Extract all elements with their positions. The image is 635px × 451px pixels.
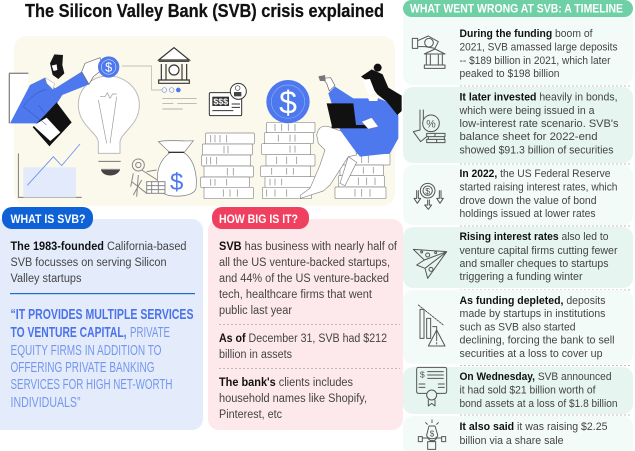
icon: hands holding money bag: [418, 420, 446, 449]
timeline step: deposits decline: such as SVB also started: [460, 322, 576, 334]
text: business share: [219, 241, 398, 317]
text: clients: household names like Shopify,: [219, 393, 367, 405]
illustration: woman with laptop: [301, 64, 402, 198]
timeline step: funding boom: peaked to $198 billion: [460, 68, 560, 80]
text: intro: [10, 241, 186, 285]
icon: dollar coin small: $: [105, 61, 112, 75]
icon: money bag: $: [170, 169, 183, 196]
timeline step: deposits decline: made by startups in institutions: [460, 308, 606, 320]
icon: keys: [131, 159, 165, 197]
badge: what is SVB: [2, 207, 93, 229]
text: business share: public last year: [219, 305, 292, 317]
text: quote: INDIVIDUALS”: [10, 394, 81, 411]
icon: interest down with coins: [413, 110, 445, 143]
icon: large dollar coin: $: [279, 84, 297, 120]
title: The Silicon Valley Bank (SVB) crisis explained: [25, 1, 384, 21]
icon: coin with down arrows: $: [425, 186, 430, 196]
panel: timeline: [403, 0, 633, 451]
coin stack right: [335, 154, 390, 199]
icon: falling bars and warning: [418, 305, 445, 346]
timeline step: funding boom: -- $189 billion in 2021, which later: [460, 55, 611, 67]
timeline step: share sale: [403, 416, 633, 451]
text: business share: all the US venture-backed startups,: [219, 257, 390, 269]
timeline step: bond sale: it had sold $21 billion worth of: [460, 384, 596, 396]
text: intro: The 1983-founded California-based: [10, 241, 186, 253]
badge: what is SVB: WHAT IS SVB?: [10, 212, 86, 226]
timeline step: bonds: low-interest rate scenario. SVB's: [460, 118, 619, 130]
panel: how big is it: [208, 207, 403, 430]
panel: illustration: [9, 36, 402, 206]
timeline step: federal reserve: [403, 165, 633, 225]
timeline step: bond sale: On Wednesday, SVB announced: [460, 371, 612, 383]
icon: money bag: [157, 141, 196, 196]
coin stack centre: [261, 122, 315, 199]
text: quote: “IT PROVIDES MULTIPLE SERVICES: [10, 306, 194, 323]
text: business share: tech, healthcare firms that went: [219, 289, 373, 301]
icon: hands holding money bag: $: [430, 430, 435, 439]
timeline step: bond sale: [403, 367, 633, 414]
timeline step: funding winter: [403, 227, 633, 288]
text: clients: The bank's clients includes: [219, 377, 353, 389]
text: intro: Valley startups: [10, 273, 82, 285]
icon: bank building: [159, 48, 189, 83]
timeline step: funding boom: During the funding boom of: [460, 28, 593, 40]
icon: interest down with coins: %: [426, 118, 436, 130]
icon: payment terminal: $$$: [213, 98, 229, 107]
timeline step: bonds: [403, 87, 633, 163]
illustration: man with coin: [9, 54, 104, 146]
text: assets: [219, 333, 387, 361]
timeline step: funding winter: Rising interest rates also led to: [460, 231, 608, 243]
text: quote: OFFERING PRIVATE BANKING: [10, 359, 154, 376]
timeline step: bonds: which were being issued in a: [459, 105, 595, 117]
timeline step: federal reserve: drove down the value of bond: [460, 195, 596, 207]
timeline step: deposits decline: [403, 290, 633, 364]
text: quote: [10, 306, 194, 411]
icon: light bulb: [78, 76, 139, 175]
timeline step: deposits decline: securities at a loss to cover up: [460, 348, 602, 360]
icon: certificate: [417, 367, 447, 406]
badge: how big is it: [212, 207, 309, 229]
timeline step: bonds: balance sheet for 2022-end: [460, 131, 598, 143]
icon: large dollar coin: [266, 80, 310, 123]
text: quote: SERVICES FOR HIGH NET-WORTH: [10, 376, 172, 393]
icon: dollar coin small: [98, 56, 119, 78]
icon: certificate: $: [420, 370, 425, 380]
timeline step: federal reserve: In 2022, the US Federal Reserve: [460, 168, 610, 180]
icon: hand and bank: [412, 36, 445, 68]
timeline step: share sale: billion via a share sale: [460, 435, 564, 447]
text: intro: SVB focusses on serving Silicon: [10, 257, 166, 269]
text: business share: SVB has business with nearly half of: [219, 241, 398, 253]
timeline step: funding winter: venture capital firms cutting fewer: [460, 245, 618, 257]
timeline step: bonds: showed $91.3 billion of securities: [460, 144, 614, 156]
timeline step: funding winter: and smaller cheques to startups: [460, 258, 609, 270]
timeline step: federal reserve: started raising interest rates, which: [460, 182, 618, 194]
icon: coin with down arrows: [414, 183, 443, 209]
badge: how big is it: HOW BIG IS IT?: [219, 212, 298, 226]
coin stack left: [201, 133, 254, 199]
timeline step: federal reserve: holdings issued at lower rates: [460, 208, 596, 220]
text: quote: TO VENTURE CAPITAL,: [10, 324, 126, 341]
timeline step: share sale: It also said it was raising $2.25: [460, 421, 608, 433]
timeline step: deposits decline: declining, forcing the bank to sell: [460, 334, 614, 346]
timeline step: funding boom: 2021, SVB amassed large deposits: [460, 42, 618, 54]
text: assets: As of December 31, SVB had $212: [219, 333, 387, 345]
connector with dots and lines: [122, 66, 197, 109]
text: quote: EQUITY FIRMS IN ADDITION TO: [10, 342, 162, 359]
text: assets: billion in assets: [219, 349, 292, 361]
panel: what is SVB: [0, 207, 203, 430]
timeline step: funding winter: triggering a funding winter: [460, 271, 583, 283]
timeline step: bonds: It later invested heavily in bonds,: [460, 92, 618, 104]
text: business share: and 44% of the US venture-backed: [219, 273, 389, 285]
icon: paper plane: [413, 249, 447, 278]
icon: payment terminal: [209, 83, 246, 116]
timeline step: bond sale: bond assets at a loss of $1.8 billion: [460, 398, 618, 410]
chart: rising line: [18, 144, 82, 197]
text: clients: Pinterest, etc: [219, 409, 282, 421]
timeline step: deposits decline: As funding depleted, deposits: [460, 295, 606, 307]
text: quote: PRIVATE: [130, 324, 170, 341]
timeline step: funding boom: [403, 10, 633, 85]
text: clients: [219, 377, 367, 421]
